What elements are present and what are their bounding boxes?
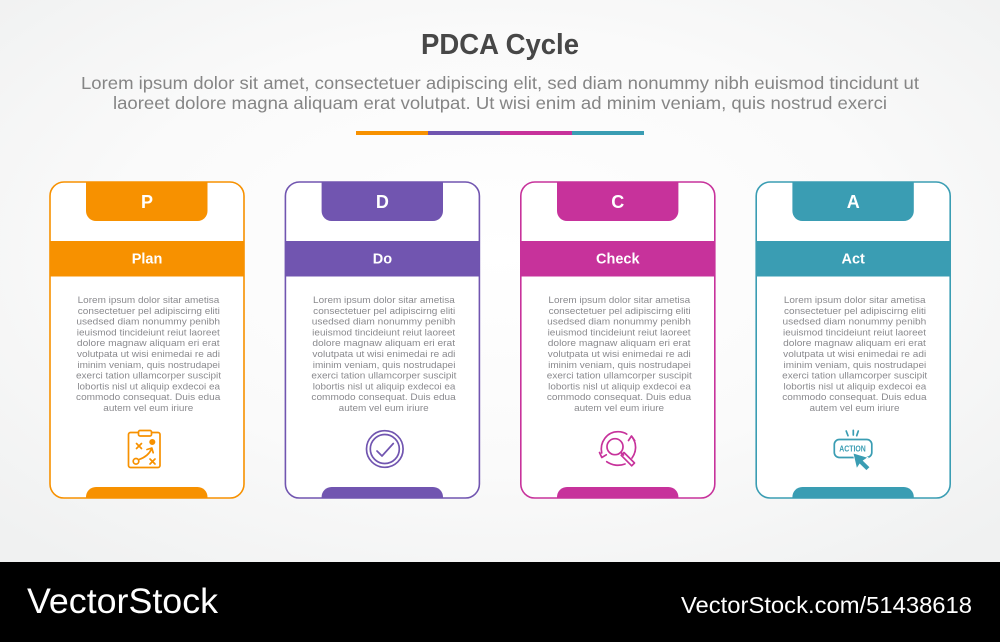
body text: check: usedsed diam nonummy penibh xyxy=(547,317,691,327)
icon: magnifier cycle xyxy=(600,432,636,466)
title: PDCA Cycle xyxy=(421,29,579,61)
band: Plan xyxy=(50,241,244,276)
body text: act: ieuismod tincideiunt reiut laoreet xyxy=(783,327,926,337)
bottom tab: act xyxy=(792,487,914,498)
footer image id: VectorStock.com/51438618 xyxy=(681,592,972,618)
body text: plan: consectetuer pel adipiscirng eliti xyxy=(78,306,220,316)
body text: check: commodo consequat. Duis edua xyxy=(547,392,692,402)
body text: do: lobortis nisl ut aliquip exdecoi ea xyxy=(313,381,456,391)
body text: check: lobortis nisl ut aliquip exdecoi ea xyxy=(548,381,692,391)
heading: Plan: Plan xyxy=(132,252,162,268)
body text: do: dolore magnaw aliquam eri erat xyxy=(312,338,455,348)
body text: act: iminim veniam, quis nostrudapei xyxy=(784,360,926,370)
band: Check xyxy=(520,241,715,276)
footer bar xyxy=(0,562,1000,642)
body text: plan: usedsed diam nonummy penibh xyxy=(76,317,220,327)
body text: do: iminim veniam, quis nostrudapei xyxy=(313,360,455,370)
body text: check: dolore magnaw aliquam eri erat xyxy=(548,338,691,348)
body text: do: usedsed diam nonummy penibh xyxy=(312,317,455,327)
body text: act: dolore magnaw aliquam eri erat xyxy=(783,338,926,348)
body text: act: exerci tation ullamcorper suscipit xyxy=(782,371,928,381)
footer logo text: VectorStock xyxy=(27,582,219,621)
colored divider xyxy=(356,131,644,135)
bottom tab: check xyxy=(557,487,678,498)
letter: A: A xyxy=(847,192,860,212)
panel: check xyxy=(520,182,715,498)
heading: Do: Do xyxy=(373,252,392,268)
body text: do: exerci tation ullamcorper suscipit xyxy=(311,371,457,381)
band: Act xyxy=(756,241,951,276)
body text: act: volutpata ut wisi enimedai re adi xyxy=(783,349,926,359)
subtitle text: laoreet dolore magna aliquam erat volutpat. Ut wisi enim ad minim veniam, quis nostrud exerci xyxy=(113,93,887,113)
tab: P xyxy=(86,182,208,221)
body text: act: lobortis nisl ut aliquip exdecoi ea xyxy=(784,381,927,391)
body text: act: Lorem ipsum dolor sitar ametisa xyxy=(784,295,926,305)
tab: D xyxy=(322,182,443,221)
icon: clipboard strategy xyxy=(128,430,160,468)
letter: C: C xyxy=(611,192,624,212)
body text: plan: volutpata ut wisi enimedai re adi xyxy=(77,349,220,359)
body text: do xyxy=(311,295,457,413)
panel: plan xyxy=(50,182,244,498)
subtitle text xyxy=(81,73,919,113)
subtitle text: Lorem ipsum dolor sit amet, consectetuer adipiscing elit, sed diam nonummy nibh euismod tincidunt ut xyxy=(81,73,919,93)
body text: check: Lorem ipsum dolor sitar ametisa xyxy=(548,295,691,305)
body text: check: exerci tation ullamcorper suscipit xyxy=(547,371,692,381)
body text: plan: autem vel eum iriure xyxy=(103,403,193,413)
body text: act xyxy=(782,295,928,413)
body text: plan: commodo consequat. Duis edua xyxy=(76,392,221,402)
body text: do: autem vel eum iriure xyxy=(339,403,429,413)
letter: D: D xyxy=(376,192,389,212)
body text: plan: ieuismod tincideiunt reiut laoreet xyxy=(77,327,220,337)
body text: check: iminim veniam, quis nostrudapei xyxy=(548,360,691,370)
tab: C xyxy=(557,182,678,221)
panel: do xyxy=(285,182,480,498)
body text: plan: dolore magnaw aliquam eri erat xyxy=(77,338,220,348)
panel: act xyxy=(756,182,951,498)
body text: plan: iminim veniam, quis nostrudapei xyxy=(77,360,220,370)
body text: plan xyxy=(76,295,221,413)
body text: check: consectetuer pel adipiscirng eliti xyxy=(549,306,691,316)
icon: action button: ACTION xyxy=(839,443,866,453)
body text: plan: Lorem ipsum dolor sitar ametisa xyxy=(78,295,220,305)
body text: act: commodo consequat. Duis edua xyxy=(782,392,927,402)
body text: do: consectetuer pel adipiscirng eliti xyxy=(313,306,455,316)
body text: check: volutpata ut wisi enimedai re adi xyxy=(548,349,691,359)
body text: act: usedsed diam nonummy penibh xyxy=(783,317,926,327)
heading: Check: Check xyxy=(596,252,640,268)
body text: check: autem vel eum iriure xyxy=(574,403,664,413)
bottom tab: do xyxy=(322,487,443,498)
bottom tab: plan xyxy=(86,487,208,498)
body text: plan: lobortis nisl ut aliquip exdecoi ea xyxy=(77,381,221,391)
body text: do: ieuismod tincideiunt reiut laoreet xyxy=(312,327,456,337)
body text: check xyxy=(547,295,692,413)
icon: action button xyxy=(834,430,872,471)
icon: check circle xyxy=(366,431,403,467)
body text: plan: exerci tation ullamcorper suscipit xyxy=(76,371,221,381)
body text: act: autem vel eum iriure xyxy=(810,403,900,413)
body text: check: ieuismod tincideiunt reiut laoreet xyxy=(548,327,691,337)
body text: do: commodo consequat. Duis edua xyxy=(311,392,457,402)
letter: P: P xyxy=(141,192,153,212)
band: Do xyxy=(285,241,480,276)
body text: act: consectetuer pel adipiscirng eliti xyxy=(784,306,926,316)
heading: Act: Act xyxy=(842,252,865,268)
body text: do: Lorem ipsum dolor sitar ametisa xyxy=(313,295,456,305)
body text: do: volutpata ut wisi enimedai re adi xyxy=(312,349,455,359)
tab: A xyxy=(792,182,914,221)
